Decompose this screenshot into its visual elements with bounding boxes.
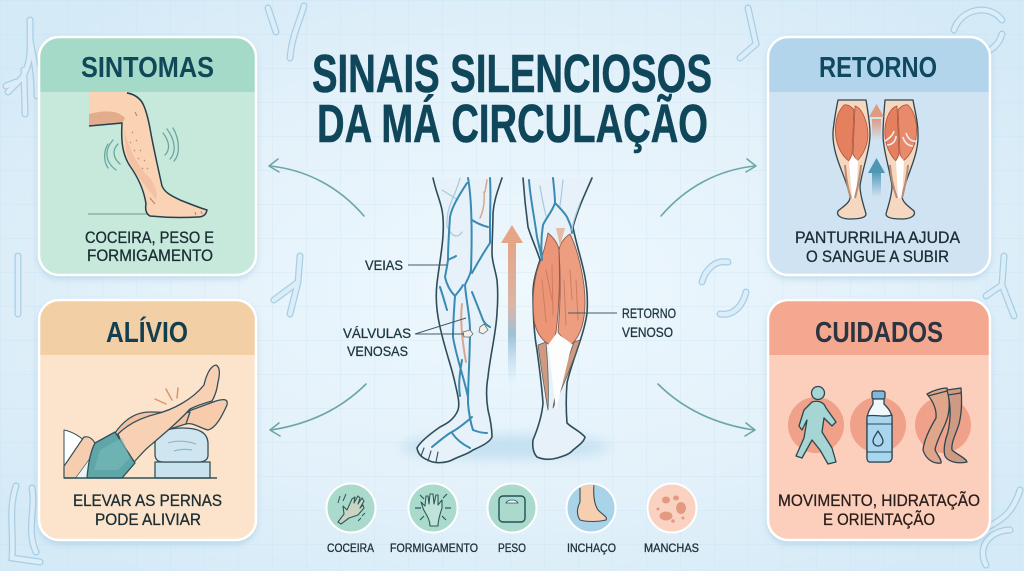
caption: retorno (795, 228, 961, 266)
icon: water bottle (850, 391, 906, 462)
arrow: central diagram to retorno (661, 159, 756, 216)
caption: alívio (73, 491, 222, 529)
caption: cuidados: E ORIENTAÇÃO (823, 510, 935, 529)
title: DA MÁ CIRCULAÇÃO (317, 94, 708, 154)
arrow: central diagram to cuidados (658, 384, 755, 436)
icon: compression stockings (915, 388, 971, 463)
leg with calf muscle (523, 178, 592, 459)
label: veias (365, 257, 447, 273)
diagram: leg anatomy (343, 178, 676, 463)
label: válvulas venosas (343, 318, 466, 359)
caption: retorno: O SANGUE A SUBIR (806, 247, 949, 266)
caption: sintomas: COCEIRA, PESO E (85, 228, 214, 247)
icon: inchaço: INCHAÇO (567, 541, 616, 555)
panel: cuidados (768, 300, 990, 540)
heading: cuidados: CUIDADOS (815, 317, 943, 349)
icon: peso: PESO (498, 541, 526, 555)
label: retorno venoso: VENOSO (622, 324, 673, 340)
heading: sintomas: SINTOMAS (81, 52, 214, 84)
panel: alívio (39, 300, 256, 540)
illustration: elevated legs on pillow (64, 365, 227, 478)
icon: manchas (644, 484, 699, 555)
title (312, 44, 712, 154)
label: retorno venoso (568, 305, 676, 340)
caption: retorno: PANTURRILHA AJUDA (795, 228, 961, 247)
arrow: central diagram to sintomas (269, 159, 364, 216)
icon: formigamento (390, 484, 478, 555)
title: SINAIS SILENCIOSOS (312, 44, 712, 104)
caption: sintomas (85, 228, 214, 265)
caption: alívio: ELEVAR AS PERNAS (73, 491, 222, 510)
leg with veins (417, 178, 502, 463)
label: válvulas venosas: VÁLVULAS (343, 325, 411, 341)
icon: coceira (326, 484, 376, 555)
arrow: venous flow upward (501, 225, 523, 385)
label: veias: VEIAS (365, 257, 403, 273)
icon: walking person (788, 386, 844, 464)
icon: formigamento: FORMIGAMENTO (390, 541, 478, 555)
caption: cuidados: MOVIMENTO, HIDRATAÇÃO (778, 491, 980, 510)
illustration: calf muscles (833, 100, 918, 219)
heading: alívio: ALÍVIO (106, 315, 188, 349)
icon: manchas: MANCHAS (644, 541, 699, 555)
label: válvulas venosas: VENOSAS (347, 343, 408, 359)
icon: inchaço (566, 484, 616, 555)
icon: peso (488, 484, 536, 555)
caption: cuidados (778, 491, 980, 529)
illustration: leg with itching (88, 93, 207, 217)
panel: sintomas (39, 37, 256, 275)
caption: sintomas: FORMIGAMENTO (87, 246, 213, 265)
panel: retorno (768, 37, 990, 275)
icon: coceira: COCEIRA (327, 541, 374, 555)
arrow: central diagram to alívio (270, 384, 366, 436)
label: retorno venoso: RETORNO (622, 305, 676, 321)
caption: alívio: PODE ALIVIAR (95, 510, 201, 529)
heading: retorno: RETORNO (819, 52, 937, 84)
symptom icons row (326, 484, 699, 555)
